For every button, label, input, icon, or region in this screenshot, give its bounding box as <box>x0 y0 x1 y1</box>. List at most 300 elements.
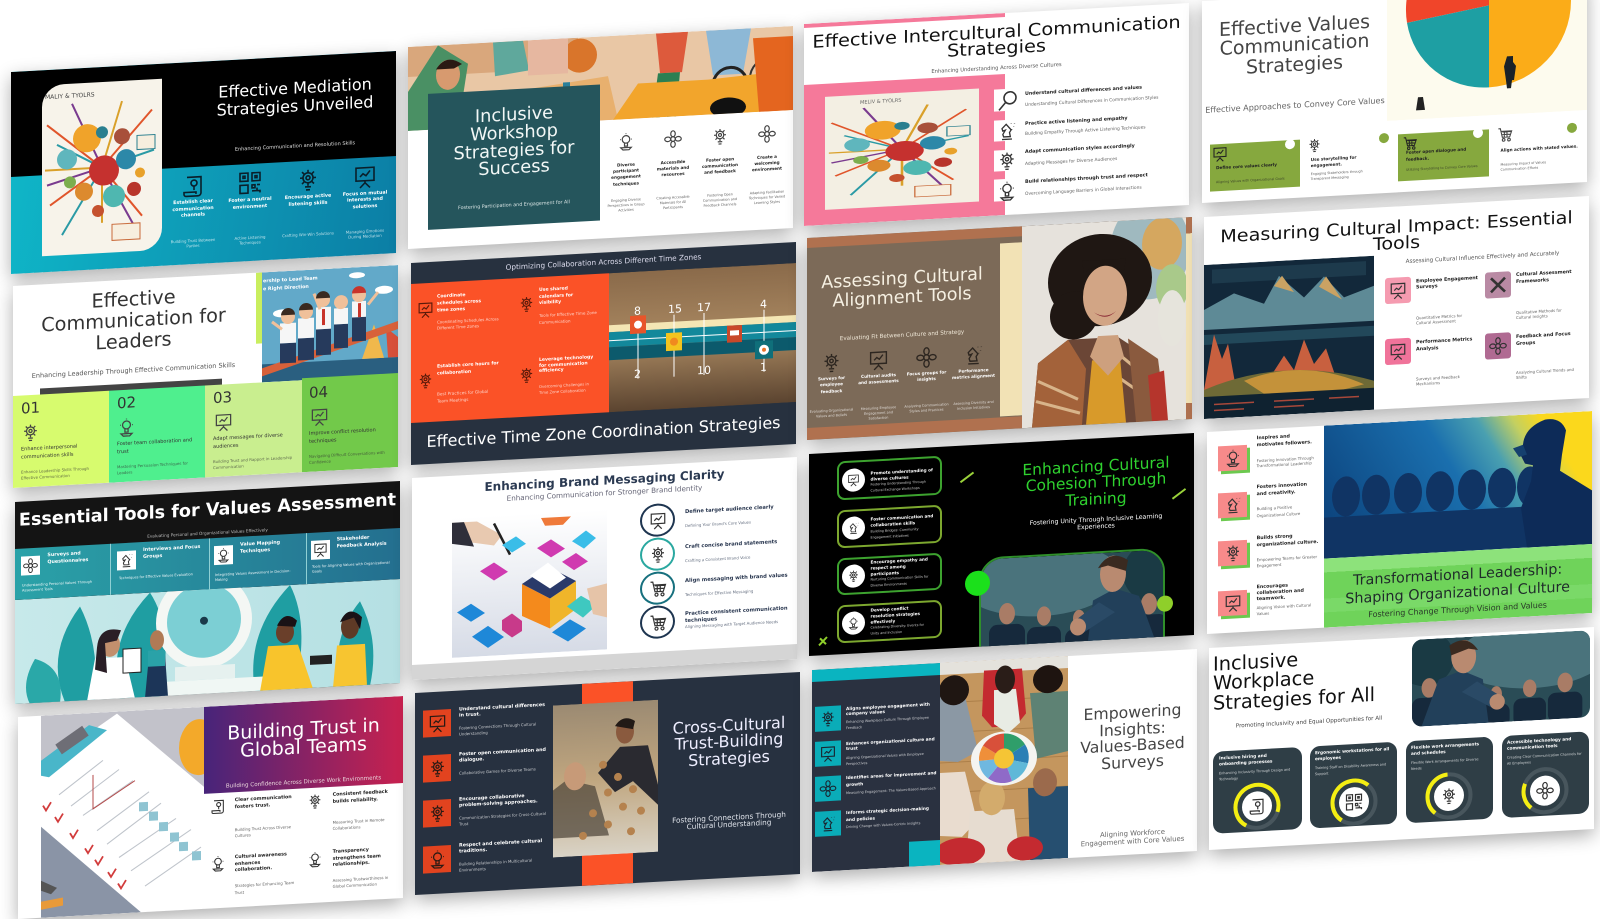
icon: gear <box>1310 139 1320 152</box>
number 04: 04 <box>309 383 328 402</box>
subtitle: Fostering Unity Through Inclusive Learning Experiences <box>1030 512 1162 531</box>
item detail 2: Crafting a Consistent Brand Voice <box>685 555 750 563</box>
panel: Effective Values Communication Strategies <box>1202 0 1586 203</box>
item detail 4: Measuring Impact of Values Communication Efforts <box>1500 160 1546 171</box>
panel: Effective Intercultural Communication Strategies <box>804 3 1189 226</box>
item heading 4: Performance metrics alignment <box>952 367 995 381</box>
item detail 1: Defining Your Brand's Core Values <box>685 520 751 528</box>
item heading 2: Practice active listening and empathy <box>1025 116 1128 127</box>
item detail 2: Measuring Employee Engagement and Satisfaction <box>861 405 896 421</box>
timeline numbers: 15 <box>668 302 682 316</box>
icon: hand <box>1000 152 1014 170</box>
panel: Enhancing Brand Messaging Clarity <box>412 457 797 680</box>
item heading 4: Focus on mutual interests and solutions <box>343 190 387 210</box>
title: Strategies <box>947 35 1046 61</box>
lime strip <box>256 272 262 344</box>
icon: easel <box>870 351 888 370</box>
item heading 3: Foster open dialogue and feedback. <box>1406 147 1466 161</box>
image: mind map <box>825 88 979 210</box>
item heading 3: Foster open communication and feedback <box>702 156 738 175</box>
item heading 4: Build relationships through trust and respect <box>1025 173 1148 185</box>
white notch 2 <box>994 120 1008 142</box>
card 4 <box>1502 731 1589 818</box>
item 2 text: Building Bridges: Community Engagement Initiatives <box>870 527 919 540</box>
title: Effective Intercultural Communication <box>812 12 1181 52</box>
title: Values-Based <box>1080 733 1185 758</box>
item 3 text: Nurturing Communication Skills for Diverse Environments <box>870 575 928 588</box>
icon circle 3 <box>842 564 865 588</box>
panel: Enhancing Cultural Cohesion Through Training <box>809 433 1194 656</box>
item detail 2: Qualitative Methods for Cultural Insights <box>1516 308 1562 320</box>
item heading 4: Encourages collaboration and teamwork. <box>1257 583 1304 602</box>
photo frame: pointing man <box>979 548 1165 653</box>
divider lines <box>110 538 210 594</box>
icon tile 4 <box>423 845 451 873</box>
item heading 3: Adapt messages for diverse audiences <box>213 432 283 450</box>
item detail 2: Measuring Trust in Remote Collaborations <box>333 817 385 831</box>
item detail 3: Strategies for Enhancing Team Trust <box>235 880 294 895</box>
icon: gear <box>420 374 432 388</box>
item detail 2: Aligning Organizational Values with Employee Perspectives <box>846 751 924 766</box>
title <box>821 264 983 311</box>
title <box>454 102 574 181</box>
title: Trust-Building <box>675 729 783 754</box>
icon tile: tools <box>1485 271 1511 299</box>
bright green dot <box>965 570 990 596</box>
item detail 1: Building Trust Across Diverse Cultures <box>235 824 291 838</box>
item heading 2: Interviews and Focus Groups <box>143 545 200 560</box>
item heading 2: Use storytelling for engagement. <box>1310 155 1356 168</box>
panel: Effective Communication for Leaders <box>13 265 398 488</box>
item detail 3: Analyzing Communication Styles and Practices <box>904 402 949 413</box>
teal band <box>15 528 400 600</box>
title <box>217 74 373 120</box>
item heading 2: Foster a neutral environment <box>228 197 272 211</box>
item detail 1: Quantitative Metrics for Cultural Assessment <box>1416 313 1462 326</box>
pink top strip <box>804 13 1005 28</box>
item heading 4: Transparency strengthens team relationships. <box>333 848 381 868</box>
lime dot <box>1157 595 1173 612</box>
item heading 3: Encourage collaborative problem-solving approaches. <box>459 794 538 809</box>
white notch 1 <box>994 89 1008 112</box>
item heading 2: Accessible materials and resources <box>657 159 689 178</box>
item text 3: Flexible Work Arrangements for Diverse Needs <box>1411 757 1479 771</box>
illustration: scale and people <box>15 579 400 704</box>
item heading 2: Fosters innovation and creativity. <box>1257 483 1307 497</box>
title: Leaders <box>95 327 172 354</box>
icon tile 2 <box>1218 492 1247 518</box>
cross accent <box>818 636 828 647</box>
image caption <box>263 276 318 292</box>
title: Surveys <box>1101 751 1164 773</box>
item 1 text: Promote understanding of diverse cultures <box>870 467 933 482</box>
item 4 text: Develop conflict resolution strategies effectively <box>870 606 920 625</box>
item heading 4: Create a welcoming environment <box>752 154 782 173</box>
item detail 3: Techniques for Effective Messaging <box>685 588 753 597</box>
title <box>1324 559 1592 610</box>
panel: Effective Time Zone Coordination Strategies <box>411 242 796 465</box>
item text 4: Accessible technology and communication tools <box>1507 737 1571 752</box>
icon circle 1 <box>842 468 865 492</box>
badge 2 <box>1378 133 1388 143</box>
item detail 2: Techniques for Effective Values Evaluation <box>119 572 193 580</box>
item heading 2: Use shared calendars for visibility <box>539 286 573 306</box>
item heading 3: Align messaging with brand values <box>685 573 788 584</box>
icon: gear <box>520 297 532 312</box>
right edge strip <box>1186 217 1192 419</box>
green band <box>1324 544 1592 628</box>
item detail 1: Coordinating Schedules Across Different Time Zones <box>437 316 499 331</box>
item text 2 <box>1315 747 1391 778</box>
icon: easel <box>216 414 232 432</box>
panel: Inclusive Workplace Strategies for All <box>1209 627 1594 850</box>
badge 3 <box>1472 128 1482 138</box>
item detail 4: Assessing Diversity and Inclusion Initiatives <box>953 400 994 411</box>
item 4 text: Celebrating Diversity: Events for Unity and Inclusion <box>870 623 924 636</box>
item heading 3: Builds strong organizational culture. <box>1257 534 1318 548</box>
title: Communication for <box>41 303 226 336</box>
title <box>999 453 1193 513</box>
title: Building Trust in <box>227 714 380 744</box>
gauge 2 <box>1328 774 1380 829</box>
card 4 <box>837 599 942 643</box>
top strip <box>807 226 1022 248</box>
icon: qr <box>239 172 261 194</box>
subtitle <box>1070 826 1195 849</box>
item heading 1: Surveys for employee feedback <box>818 375 845 394</box>
illustration: pie with figures <box>1387 0 1587 121</box>
badge 4 <box>1566 123 1576 133</box>
title: Inclusive <box>475 102 553 127</box>
photo: building with wooden blocks <box>552 699 658 857</box>
image: timeline on wood <box>609 263 796 412</box>
panel: Assessing Cultural Alignment Tools <box>807 217 1192 440</box>
card 2 <box>1310 742 1397 829</box>
icon tile: easel <box>1385 277 1411 304</box>
dark left panel <box>812 663 940 872</box>
title: Training <box>1065 488 1127 510</box>
icon: person <box>120 418 134 437</box>
item heading 2: Cultural Assessment Frameworks <box>1516 270 1572 285</box>
item heading 1: Diverse participant engagement techniques <box>611 162 641 186</box>
item detail 2: Active Listening Techniques <box>235 234 265 246</box>
title <box>41 285 226 354</box>
icon tile 2 <box>814 740 840 766</box>
icon: cart <box>1498 128 1512 142</box>
item text 4: Creating Clear Communication Channels for All Employees <box>1507 752 1582 766</box>
title: Assessing Cultural <box>821 264 983 293</box>
icon tile 3 <box>423 799 451 828</box>
title: Inclusive <box>1213 648 1298 675</box>
numbered ring 2 <box>640 537 675 572</box>
title: Effective Values <box>1218 11 1370 41</box>
timeline numbers: 2 <box>634 367 641 381</box>
item heading 1: Employee Engagement Surveys <box>1416 276 1478 291</box>
panel: Measuring Cultural Impact: Essential Tools <box>1204 196 1589 419</box>
white notch 3 <box>994 149 1008 172</box>
title: Empowering <box>1084 700 1181 724</box>
title: Tools <box>1373 231 1420 254</box>
number 03: 03 <box>213 388 232 407</box>
item detail 3: Integrating Values Assessment in Decision-Making <box>215 568 291 582</box>
title: Enhancing Brand Messaging Clarity <box>484 467 725 494</box>
card 3 <box>1406 737 1493 823</box>
item heading 4: Leverage technology for communication efficiency <box>539 355 593 374</box>
item heading 4: Informs strategic decision-making and policies <box>846 807 929 823</box>
cell 03 <box>205 380 302 478</box>
title: Strategies Unveiled <box>217 92 373 120</box>
item 3 text: Encourage empathy and respect among participants <box>870 556 928 577</box>
title <box>1204 209 1589 261</box>
card 3 <box>837 553 942 595</box>
item text 3: Flexible work arrangements and schedules <box>1411 742 1479 757</box>
timeline numbers: 8 <box>634 304 641 318</box>
title: Success <box>478 156 550 181</box>
title <box>1070 701 1195 774</box>
item heading 4: Align actions with stated values. <box>1500 144 1577 153</box>
title: Shaping Organizational Culture <box>1345 579 1570 607</box>
item text 3 <box>1411 742 1487 773</box>
title: Cohesion Through <box>1026 470 1166 495</box>
title: Global Teams <box>240 733 367 762</box>
title <box>659 714 799 771</box>
panel: Inclusive Workshop Strategies for Success <box>408 26 793 249</box>
illustration: team on a rising slope <box>262 265 398 382</box>
gauge 1 <box>1231 779 1283 834</box>
title: Communication <box>1219 30 1369 60</box>
orange panel <box>411 273 609 423</box>
icon tile 1 <box>1218 445 1247 471</box>
orange vertical strip <box>582 681 633 886</box>
icon: bulb <box>619 133 633 151</box>
item detail 1: Understanding Cultural Differences in Communication Styles <box>1025 96 1158 108</box>
item detail 1: Enhance Leadership Skills Through Effective Communication <box>21 466 89 481</box>
item detail 1: Engaging Diverse Perspectives in Group Activities <box>608 197 644 213</box>
item heading 2: Foster open communication and dialogue. <box>459 747 546 764</box>
title: Strategies <box>688 747 770 770</box>
item heading 2: Craft concise brand statements <box>685 539 777 550</box>
item heading 4: Respect and celebrate cultural traditions. <box>459 839 542 855</box>
item detail 4: Aligning Messaging with Target Audience Needs <box>685 619 778 629</box>
item heading 1: Define target audience clearly <box>685 504 774 515</box>
item heading 4: Stakeholder Feedback Analysis <box>337 536 387 549</box>
item detail 3: Adapting Messages for Diverse Audiences <box>1025 157 1117 167</box>
item 2 text <box>870 513 936 541</box>
bottom strip <box>807 416 1022 440</box>
numbered ring 4 <box>640 605 675 640</box>
pink panel <box>804 74 1005 226</box>
item text 2: Ergonomic workstations for all employees <box>1315 747 1389 762</box>
icon: globe <box>758 125 776 143</box>
item detail 1: Fostering Innovation Through Transformational Leadership <box>1257 455 1314 468</box>
item detail 4: Analyzing Cultural Trends and Shifts <box>1516 367 1574 380</box>
green card 3 <box>1398 129 1488 181</box>
title <box>204 715 403 763</box>
panel: Essential Tools for Values Assessment <box>15 481 400 704</box>
icon circle 4 <box>842 611 865 635</box>
item heading 1: Surveys and Questionnaires <box>47 551 88 565</box>
title: Alignment Tools <box>832 284 972 311</box>
dash accent <box>960 472 974 483</box>
item detail 3: Crafting Win-Win Solutions <box>282 230 334 238</box>
item heading 4: Improve conflict resolution techniques <box>309 427 376 445</box>
icon: knight <box>963 343 984 366</box>
icon: bulb <box>210 855 226 873</box>
black header band <box>11 51 396 177</box>
item heading 3: Adapt communication styles accordingly <box>1025 144 1135 155</box>
icon: easel <box>355 166 375 188</box>
item detail 1: Fostering Connections Through Cultural Understanding <box>459 721 536 737</box>
number 01: 01 <box>21 399 40 418</box>
icon: gear <box>520 368 532 383</box>
title: Effective Mediation <box>218 74 372 102</box>
timeline numbers: 1 <box>760 361 767 374</box>
item detail 4: Overcoming Language Barriers in Global Interactions <box>1025 186 1142 197</box>
title: Effective <box>91 285 176 312</box>
divider line <box>306 533 307 584</box>
icon: scroll <box>210 798 226 816</box>
item heading 2: Consistent feedback builds reliability. <box>333 790 388 804</box>
item detail 3: Fostering Open Communication and Feedback Channels <box>703 192 737 208</box>
item heading 1: Establish clear communication channels <box>172 199 214 219</box>
item detail 3: Best Practices for Global Team Meetings <box>437 389 488 404</box>
white notch 4 <box>994 179 1008 202</box>
item detail 3: Utilizing Storytelling to Convey Core Values <box>1406 163 1477 171</box>
photo: woman with world map behind <box>1022 218 1186 428</box>
item text 2: Training Staff on Disability Awareness and Support <box>1315 762 1386 776</box>
number 02: 02 <box>117 393 136 412</box>
card 2 <box>837 504 942 548</box>
title: Strategies for All <box>1213 683 1375 715</box>
icon: easel <box>1213 147 1227 162</box>
image: mind map: MELIV & TYOLRS <box>860 98 901 106</box>
subtitle: Aligning Workforce <box>1100 828 1165 839</box>
icon tile 3 <box>214 545 233 565</box>
cell 01 <box>13 391 109 488</box>
image: leader and silhouettes <box>1324 411 1593 559</box>
dash accent <box>1172 488 1186 500</box>
icon circle 2 <box>842 516 865 540</box>
panel: Building Trust in Global Teams <box>18 696 403 919</box>
green card 1 <box>1210 140 1300 192</box>
item detail 2: Engaging Stakeholders through Transparent Messaging <box>1310 169 1362 181</box>
icon tile 1 <box>814 705 840 731</box>
item detail 4: Building Relationships in Multicultural Environments <box>459 857 532 873</box>
item heading 3: Identifies areas for improvement and growth <box>846 771 936 788</box>
subtitle: Enhancing Communication and Resolution Skills <box>235 140 355 153</box>
item detail 2: Mastering Persuasion Techniques for Leaders <box>117 460 188 475</box>
item heading 3: Establish core hours for collaboration <box>437 361 499 376</box>
gray bottom strip <box>412 644 797 680</box>
item 1 text <box>870 467 936 494</box>
icon: magnifier <box>998 91 1017 111</box>
item detail 4: Overcoming Challenges in Time Zone Collaboration <box>539 381 589 395</box>
icon tile 2 <box>423 754 451 783</box>
item detail 3: Empowering Teams for Greater Engagement <box>1257 553 1317 568</box>
item 3 text <box>870 556 932 589</box>
subtitle: Optimizing Collaboration Across Different Time Zones <box>506 252 701 271</box>
icon tile 4 <box>311 540 330 560</box>
title <box>1218 11 1370 78</box>
badge 1 <box>1284 139 1294 149</box>
item heading 1: schedules across <box>437 299 481 306</box>
teal corner square <box>908 840 940 867</box>
title: Strategies for <box>454 137 574 164</box>
item detail 1: Building Trust Between Parties <box>171 237 215 249</box>
item heading 3: Value Mapping Techniques <box>240 541 280 554</box>
icon: person <box>1000 182 1014 201</box>
subtitle: Building Confidence Across Diverse Work Environments <box>226 775 381 790</box>
image caption: e Right Direction <box>263 284 309 292</box>
item heading 3: Cultural awareness enhances collaboration. <box>235 852 287 873</box>
item text 1 <box>1219 752 1295 783</box>
image caption: ership to Lead Team <box>263 276 318 284</box>
icon tile 1 <box>423 709 451 737</box>
icon tile 4 <box>814 810 840 837</box>
icon: flower <box>916 346 937 369</box>
item heading 1: Clear communication fosters trust. <box>235 795 292 810</box>
item heading 1: Define core values clearly <box>1216 162 1276 170</box>
dark bar <box>40 378 222 398</box>
item heading 1: time zones <box>437 307 465 313</box>
item detail 4: Tools for Aligning Values with Organizational Goals <box>312 561 390 574</box>
icon tile 4 <box>1218 590 1247 616</box>
item detail 2: Tools for Effective Time Zone Communication <box>539 310 597 325</box>
icon: gear <box>24 424 37 442</box>
card 1 <box>1213 747 1302 834</box>
numbered ring 3 <box>640 571 675 606</box>
title: Workshop <box>470 120 558 145</box>
item detail 1: Aligning Values with Organizational Goals <box>1216 176 1284 184</box>
gauge 3 <box>1423 769 1475 823</box>
item 4 text <box>870 605 930 637</box>
item heading 1: Coordinate <box>437 293 466 299</box>
item detail 2: Creating Accessible Materials for All Participants <box>656 195 690 210</box>
item heading 1: Understand cultural differences in trust. <box>459 702 545 719</box>
item text 1: Enhancing Inclusivity Through Design and Technology <box>1219 768 1290 781</box>
item heading 3: Focus groups for insights <box>907 369 946 382</box>
numbered ring 1 <box>640 503 675 538</box>
teal title panel <box>428 85 600 230</box>
subtitle: Fostering Connections Through Cultural Understanding <box>672 809 786 831</box>
item 2 text: Foster communication and collaboration skills <box>870 513 933 528</box>
title <box>1213 644 1403 714</box>
icon: gear <box>824 354 838 372</box>
title: Measuring Cultural Impact: Essential <box>1220 207 1573 247</box>
icon: cap <box>1001 123 1016 140</box>
title: Insights: <box>1099 717 1166 740</box>
illustration: isometric brand box and cards <box>452 509 607 658</box>
icon tile 2 <box>117 550 136 570</box>
item heading 1: Inspires and motivates followers. <box>1257 434 1312 448</box>
item text 1: Inclusive hiring and onboarding processes <box>1219 754 1272 767</box>
item heading 2: Foster team collaboration and trust <box>117 437 192 455</box>
item heading 1: Aligns employee engagement with company values <box>846 702 930 717</box>
item heading 3: Encourage active listening skills <box>285 194 331 207</box>
item detail 4: Navigating Difficult Conversations with Confidence <box>309 450 385 465</box>
timeline numbers <box>634 298 767 381</box>
item heading 4: Practice consistent communication techniques <box>685 606 788 624</box>
subtitle: Fostering Participation and Engagement for All <box>458 200 570 211</box>
title gradient panel <box>204 696 403 793</box>
image: data landscape dashboard <box>1204 256 1374 419</box>
item heading 2: Cultural audits and assessments <box>858 372 899 386</box>
title: Strategies <box>1245 51 1343 78</box>
item detail 3: Building Trust and Rapport in Leadership Communication <box>213 455 292 470</box>
photo: group circle with wheel <box>940 656 1068 865</box>
panel: Empowering Insights: Values-Based Surveys <box>812 649 1197 872</box>
item detail 3: Communication Strategies for Cross-Cultural Trust <box>459 811 546 827</box>
